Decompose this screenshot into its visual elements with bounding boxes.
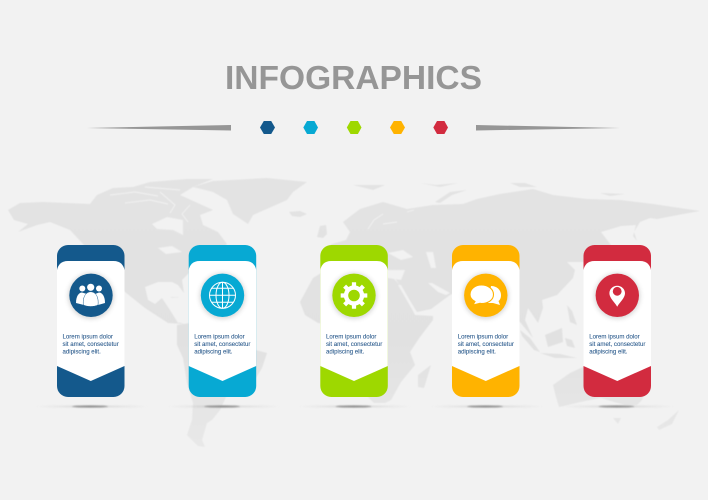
text 2: adipiscing elit. — [194, 348, 233, 355]
icon: globe — [210, 282, 236, 308]
text 3: adipiscing elit. — [326, 348, 365, 355]
white panel 2 — [189, 261, 256, 381]
text 4: adipiscing elit. — [458, 348, 496, 355]
card 3: gear — [299, 245, 411, 408]
floor shadow 3 — [299, 406, 411, 408]
hexagon markers — [260, 121, 448, 134]
left divider line — [87, 125, 231, 130]
card 4: speech bubbles — [431, 245, 543, 408]
card body 4 — [452, 245, 520, 397]
text 4: Lorem ipsum dolor — [458, 333, 508, 340]
icon disc 2 — [200, 273, 246, 319]
card 2: globe — [168, 245, 280, 408]
floor shadow 4 — [431, 406, 543, 408]
white panel 4 — [452, 261, 520, 381]
floor shadow 5 — [562, 406, 674, 408]
text 1: adipiscing elit. — [62, 348, 101, 355]
icon: people — [76, 284, 105, 306]
text 5: Lorem ipsum dolor — [589, 333, 640, 340]
icon: map pin — [609, 286, 625, 307]
text 2: Lorem ipsum dolor — [194, 333, 245, 340]
text 4: sit amet, consectetur — [458, 341, 514, 348]
icon: gear — [341, 282, 367, 309]
icon disc 1 — [68, 273, 114, 319]
card 1: team — [36, 245, 148, 408]
icon disc 5 — [594, 273, 640, 319]
right divider line — [476, 125, 620, 130]
icon disc 4 — [463, 273, 509, 319]
card body 3 — [320, 245, 388, 397]
white panel 5 — [584, 261, 651, 381]
text 1: sit amet, consectetur — [62, 341, 119, 348]
text 5: sit amet, consectetur — [589, 341, 645, 348]
white panel 1 — [57, 261, 124, 381]
text 1: Lorem ipsum dolor — [62, 333, 113, 340]
card body 2 — [189, 245, 256, 397]
card body 1 — [57, 245, 124, 397]
card body 5 — [584, 245, 651, 397]
decorative channels — [110, 187, 414, 229]
text 3: sit amet, consectetur — [326, 341, 382, 348]
icon disc 3 — [331, 273, 377, 319]
text 3: Lorem ipsum dolor — [326, 333, 376, 340]
card 5: location pin — [562, 245, 674, 408]
floor shadow 2 — [168, 406, 280, 408]
world map — [8, 178, 700, 447]
text 2: sit amet, consectetur — [194, 341, 250, 348]
title: INFOGRAPHICS — [225, 60, 482, 97]
white panel 3 — [320, 261, 388, 381]
decorative seas drawn in background colour — [152, 217, 450, 323]
floor shadow 1 — [36, 406, 148, 408]
text 5: adipiscing elit. — [589, 348, 628, 355]
icon: speech bubbles — [470, 285, 501, 305]
